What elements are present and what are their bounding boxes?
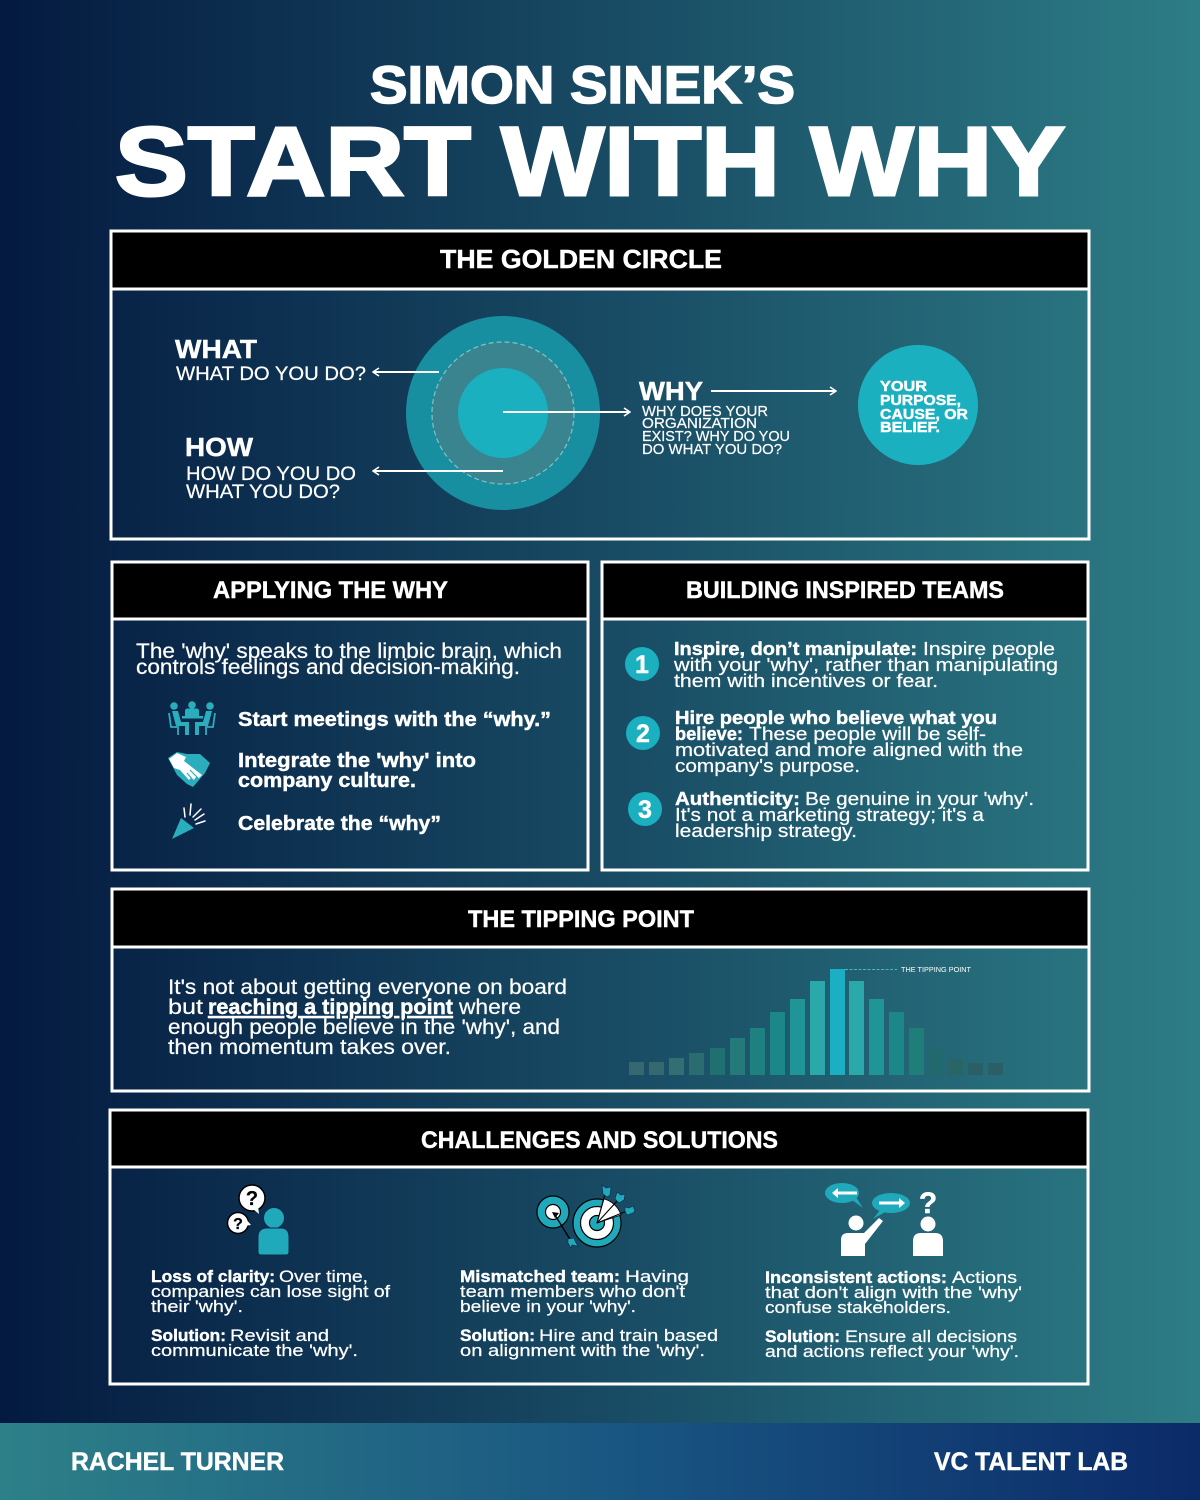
challenge 1 text: their 'why'.	[151, 1297, 243, 1316]
golden circle diagram	[406, 316, 600, 510]
tipping point text	[168, 976, 567, 1059]
challenge 2 text: Mismatched team:	[460, 1267, 620, 1286]
action: integrate	[238, 750, 476, 792]
action: celebrate: Celebrate the “why”	[238, 813, 441, 835]
tipping point text: reaching a tipping point	[208, 996, 453, 1019]
action: integrate: company culture.	[238, 770, 416, 792]
icon: meeting	[169, 701, 215, 735]
item 3 text: Be genuine in your 'why'.	[805, 789, 1034, 809]
icon: handshake	[168, 752, 210, 787]
challenge 3 text: Inconsistent actions:	[765, 1268, 947, 1287]
panel: the tipping point	[112, 889, 1089, 1091]
author name: RACHEL TURNER	[71, 1448, 284, 1476]
item 1 text: Inspire, don’t manipulate:	[674, 639, 917, 659]
item 3 text: It's not a marketing strategy; it's a	[675, 805, 985, 825]
item 1 text	[673, 639, 1058, 691]
challenge 3 text: confuse stakeholders.	[765, 1298, 951, 1317]
item 3 text: leadership strategy.	[675, 821, 857, 841]
challenge 2 text: believe in your 'why'.	[460, 1297, 636, 1316]
challenge 1 text: Over time,	[279, 1267, 368, 1286]
number 2	[626, 716, 660, 750]
heading: applying the why: APPLYING THE WHY	[213, 577, 448, 604]
icon: inconsistent people	[825, 1183, 943, 1256]
label: how: WHAT YOU DO?	[186, 482, 340, 503]
challenge 1 text: Solution:	[151, 1326, 226, 1345]
item 2 text: motivated and more aligned with the	[675, 740, 1023, 760]
challenge 2 text: Solution:	[460, 1326, 535, 1345]
item 1 text: Inspire people	[923, 639, 1055, 659]
challenge 3 text: Solution:	[765, 1327, 840, 1346]
icon: targets	[537, 1185, 635, 1248]
panel: building inspired teams	[602, 562, 1088, 870]
number 3	[628, 792, 662, 826]
purpose circle: YOUR	[880, 378, 927, 395]
panel: challenges and solutions	[110, 1110, 1088, 1384]
item 1 text: them with incentives or fear.	[674, 671, 938, 691]
label: why: ORGANIZATION	[642, 415, 757, 432]
tipping point text: where	[458, 996, 521, 1019]
arrow: how	[373, 470, 503, 472]
arrow: centre to why	[503, 411, 630, 413]
label: why: WHY	[639, 376, 703, 406]
action: integrate: Integrate the 'why' into	[238, 750, 476, 772]
label: how	[185, 432, 356, 503]
challenge 2 text: team members who don't	[460, 1282, 685, 1301]
intro text: The 'why' speaks to the limbic brain, which	[136, 640, 562, 663]
label: what: WHAT DO YOU DO?	[176, 364, 366, 385]
panel: applying the why	[112, 562, 588, 870]
purpose circle: BELIEF.	[880, 419, 940, 436]
title: SIMON SINEK’S	[370, 56, 795, 115]
number 1	[625, 647, 659, 681]
intro text	[136, 640, 562, 679]
challenge 1 text: Revisit and	[230, 1326, 329, 1345]
number 3: 3	[638, 796, 652, 824]
number 2: 2	[636, 720, 650, 748]
title: START WITH WHY	[115, 107, 1065, 216]
icon: inconsistent people: ?	[919, 1187, 937, 1220]
heading: the golden circle: THE GOLDEN CIRCLE	[440, 244, 722, 274]
label: why: WHY DOES YOUR	[642, 403, 768, 420]
purpose circle	[858, 345, 978, 465]
item 2 text: believe:	[675, 724, 743, 744]
footer	[0, 1423, 1200, 1500]
label: how: HOW	[185, 432, 253, 462]
challenge 3 text	[765, 1268, 1022, 1361]
tipping point text: but	[168, 996, 203, 1019]
item 1 text: with your 'why', rather than manipulating	[673, 655, 1058, 675]
label: why: EXIST? WHY DO YOU	[642, 428, 790, 445]
tipping point text: It's not about getting everyone on board	[168, 976, 567, 999]
challenge 1 text: communicate the 'why'.	[151, 1341, 358, 1360]
panel: the golden circle	[111, 231, 1089, 539]
item 2 text: These people will be self-	[749, 724, 986, 744]
challenge 1 text: Loss of clarity:	[151, 1267, 275, 1286]
challenge 2 text	[460, 1267, 718, 1360]
challenge 2 text: on alignment with the 'why'.	[460, 1341, 705, 1360]
label: what: WHAT	[175, 334, 257, 364]
item 2 text: Hire people who believe what you	[675, 708, 997, 728]
heading: the tipping point: THE TIPPING POINT	[468, 906, 694, 933]
bar chart: THE TIPPING POINT	[901, 967, 972, 974]
bar chart	[629, 967, 1003, 1075]
challenge 3 text: and actions reflect your 'why'.	[765, 1342, 1019, 1361]
challenge 2 text: Hire and train based	[539, 1326, 718, 1345]
action: start meetings: Start meetings with the “why.”	[238, 709, 551, 731]
intro text: controls feelings and decision-making.	[136, 656, 520, 679]
challenge 3 text: Actions	[952, 1268, 1017, 1287]
label: why: DO WHAT YOU DO?	[642, 441, 782, 458]
item 2 text	[675, 708, 1023, 776]
challenge 1 text: companies can lose sight of	[151, 1282, 390, 1301]
icon: confused person: ?	[246, 1188, 258, 1210]
challenge 2 text: Having	[625, 1267, 689, 1286]
heading: building inspired teams: BUILDING INSPIRED TEAMS	[686, 577, 1004, 604]
purpose circle: CAUSE, OR	[880, 406, 968, 423]
title	[115, 56, 1065, 216]
label: what	[175, 334, 366, 385]
icon: confused person: ?	[233, 1216, 243, 1233]
item 3 text	[675, 789, 1034, 841]
arrow: why to purpose	[711, 390, 836, 392]
label: how: HOW DO YOU DO	[186, 464, 356, 485]
challenge 3 text: that don't align with the 'why'	[765, 1283, 1022, 1302]
heading: challenges and solutions: CHALLENGES AND SOLUTIONS	[421, 1127, 778, 1154]
purpose circle: PURPOSE,	[880, 392, 961, 409]
arrow: what	[373, 371, 439, 373]
item 2 text: company's purpose.	[675, 756, 860, 776]
item 3 text: Authenticity:	[675, 789, 800, 809]
icon: party popper	[172, 804, 205, 839]
label: why	[639, 376, 790, 458]
icon: confused person	[228, 1185, 289, 1255]
challenge 3 text: Ensure all decisions	[845, 1327, 1017, 1346]
tipping point text: then momentum takes over.	[168, 1036, 451, 1059]
number 1: 1	[635, 651, 649, 679]
tipping point text: enough people believe in the 'why', and	[168, 1016, 560, 1039]
organization name: VC TALENT LAB	[934, 1448, 1128, 1476]
challenge 1 text	[151, 1267, 390, 1360]
